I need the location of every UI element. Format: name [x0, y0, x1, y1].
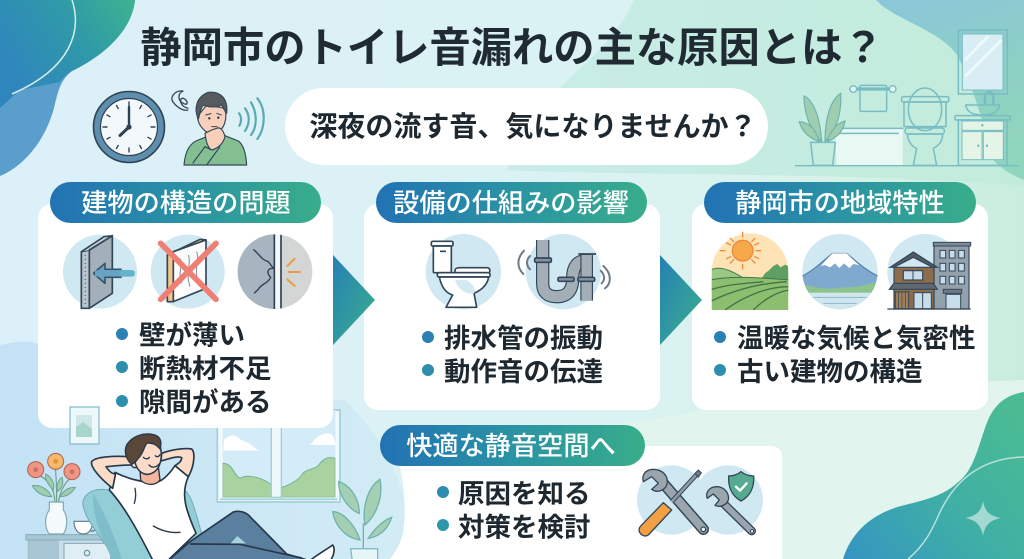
head	[131, 460, 139, 468]
bullet list: 断熱材不足	[139, 354, 272, 384]
bullet list: 排水管の振動	[444, 324, 603, 354]
bullet list: 温暖な気候と気密性	[737, 324, 976, 354]
heading pill	[704, 182, 976, 223]
icons: toilet, pipe	[426, 234, 610, 309]
side table	[26, 535, 114, 559]
bullet list: 対策を検討	[458, 512, 590, 542]
hair	[196, 92, 227, 119]
heading pill: 設備の仕組みの影響	[393, 188, 629, 218]
icon: sun over tea fields	[710, 230, 790, 312]
reclining person	[83, 434, 334, 559]
screwdriver	[639, 470, 701, 536]
icon: tools and shield	[637, 465, 763, 536]
panel: building structure	[38, 182, 333, 444]
arms	[91, 456, 132, 488]
decorative blob: top left	[0, 0, 135, 176]
icon: crack gap	[237, 233, 312, 310]
framed picture overlap	[70, 407, 99, 444]
floor	[795, 164, 1019, 168]
bullet list: 壁が薄い	[139, 320, 245, 350]
shirt	[184, 136, 247, 165]
armchair	[83, 488, 213, 559]
title: 静岡市のトイレ音漏れの主な原因とは？	[140, 25, 884, 71]
pot	[811, 142, 835, 165]
mirror	[958, 30, 1007, 94]
bullet list: 古い建物の構造	[737, 357, 922, 387]
sound waves	[239, 98, 264, 139]
icon: sparkle	[965, 501, 1001, 536]
plant	[799, 93, 845, 142]
icon: thin wall	[63, 235, 137, 309]
coffee cup	[74, 521, 97, 534]
vanity	[955, 116, 1010, 120]
speech bubble: 深夜の流す音、気になりませんか？	[309, 111, 757, 142]
bullet list: 隙間がある	[139, 388, 272, 418]
illustration: bathroom	[795, 30, 1019, 166]
decorative blob: top right	[876, 0, 1024, 180]
arrow: second to third panel	[660, 255, 702, 345]
heading pill	[380, 425, 645, 466]
toilet	[902, 97, 949, 102]
towel	[851, 84, 895, 94]
window	[217, 410, 340, 502]
neck	[140, 467, 160, 484]
decorative blob: bottom right	[843, 392, 1024, 559]
speech bubble	[285, 88, 768, 165]
flower vase	[28, 453, 80, 534]
bullet list	[116, 320, 272, 418]
small wrench	[707, 487, 754, 533]
icon: worried man	[172, 91, 264, 165]
bullet list: 原因を知る	[458, 479, 590, 509]
panel: Shizuoka regional traits	[692, 182, 988, 410]
bullet list	[714, 324, 976, 387]
icon: old house and tall building	[887, 234, 971, 309]
bullet list	[422, 324, 603, 387]
arrow: first to second panel	[333, 255, 375, 345]
bathtub	[835, 128, 903, 165]
large wrench	[643, 469, 706, 532]
heading pill: 静岡市の地域特性	[735, 188, 945, 218]
swirl	[172, 91, 188, 110]
icons: sun, Fuji, buildings	[710, 230, 971, 313]
shield	[729, 472, 754, 501]
legs	[165, 511, 313, 559]
heading pill	[376, 182, 647, 223]
shoe	[312, 545, 334, 559]
icon: vibrating drain pipe	[518, 234, 610, 309]
potted plant	[333, 479, 392, 559]
icon: Mt. Fuji	[802, 234, 878, 313]
icon: missing insulation	[151, 235, 225, 309]
icon: toilet	[426, 234, 501, 309]
illustration: relaxing man in living room	[26, 407, 392, 559]
shirt	[109, 466, 196, 559]
heading pill: 建物の構造の問題	[81, 188, 291, 218]
bullet list: 動作音の伝達	[444, 357, 603, 387]
hand	[205, 128, 225, 150]
bullet list	[437, 479, 590, 542]
panel: towards a comfortable quiet space	[380, 425, 782, 559]
heading pill	[50, 182, 321, 223]
icons: wall, insulation, gap	[63, 233, 312, 310]
icon: wall clock	[94, 92, 164, 162]
face	[197, 105, 226, 134]
panel: equipment mechanism	[364, 182, 660, 410]
heading pill: 快適な静音空間へ	[406, 431, 616, 461]
framed picture	[70, 407, 98, 444]
